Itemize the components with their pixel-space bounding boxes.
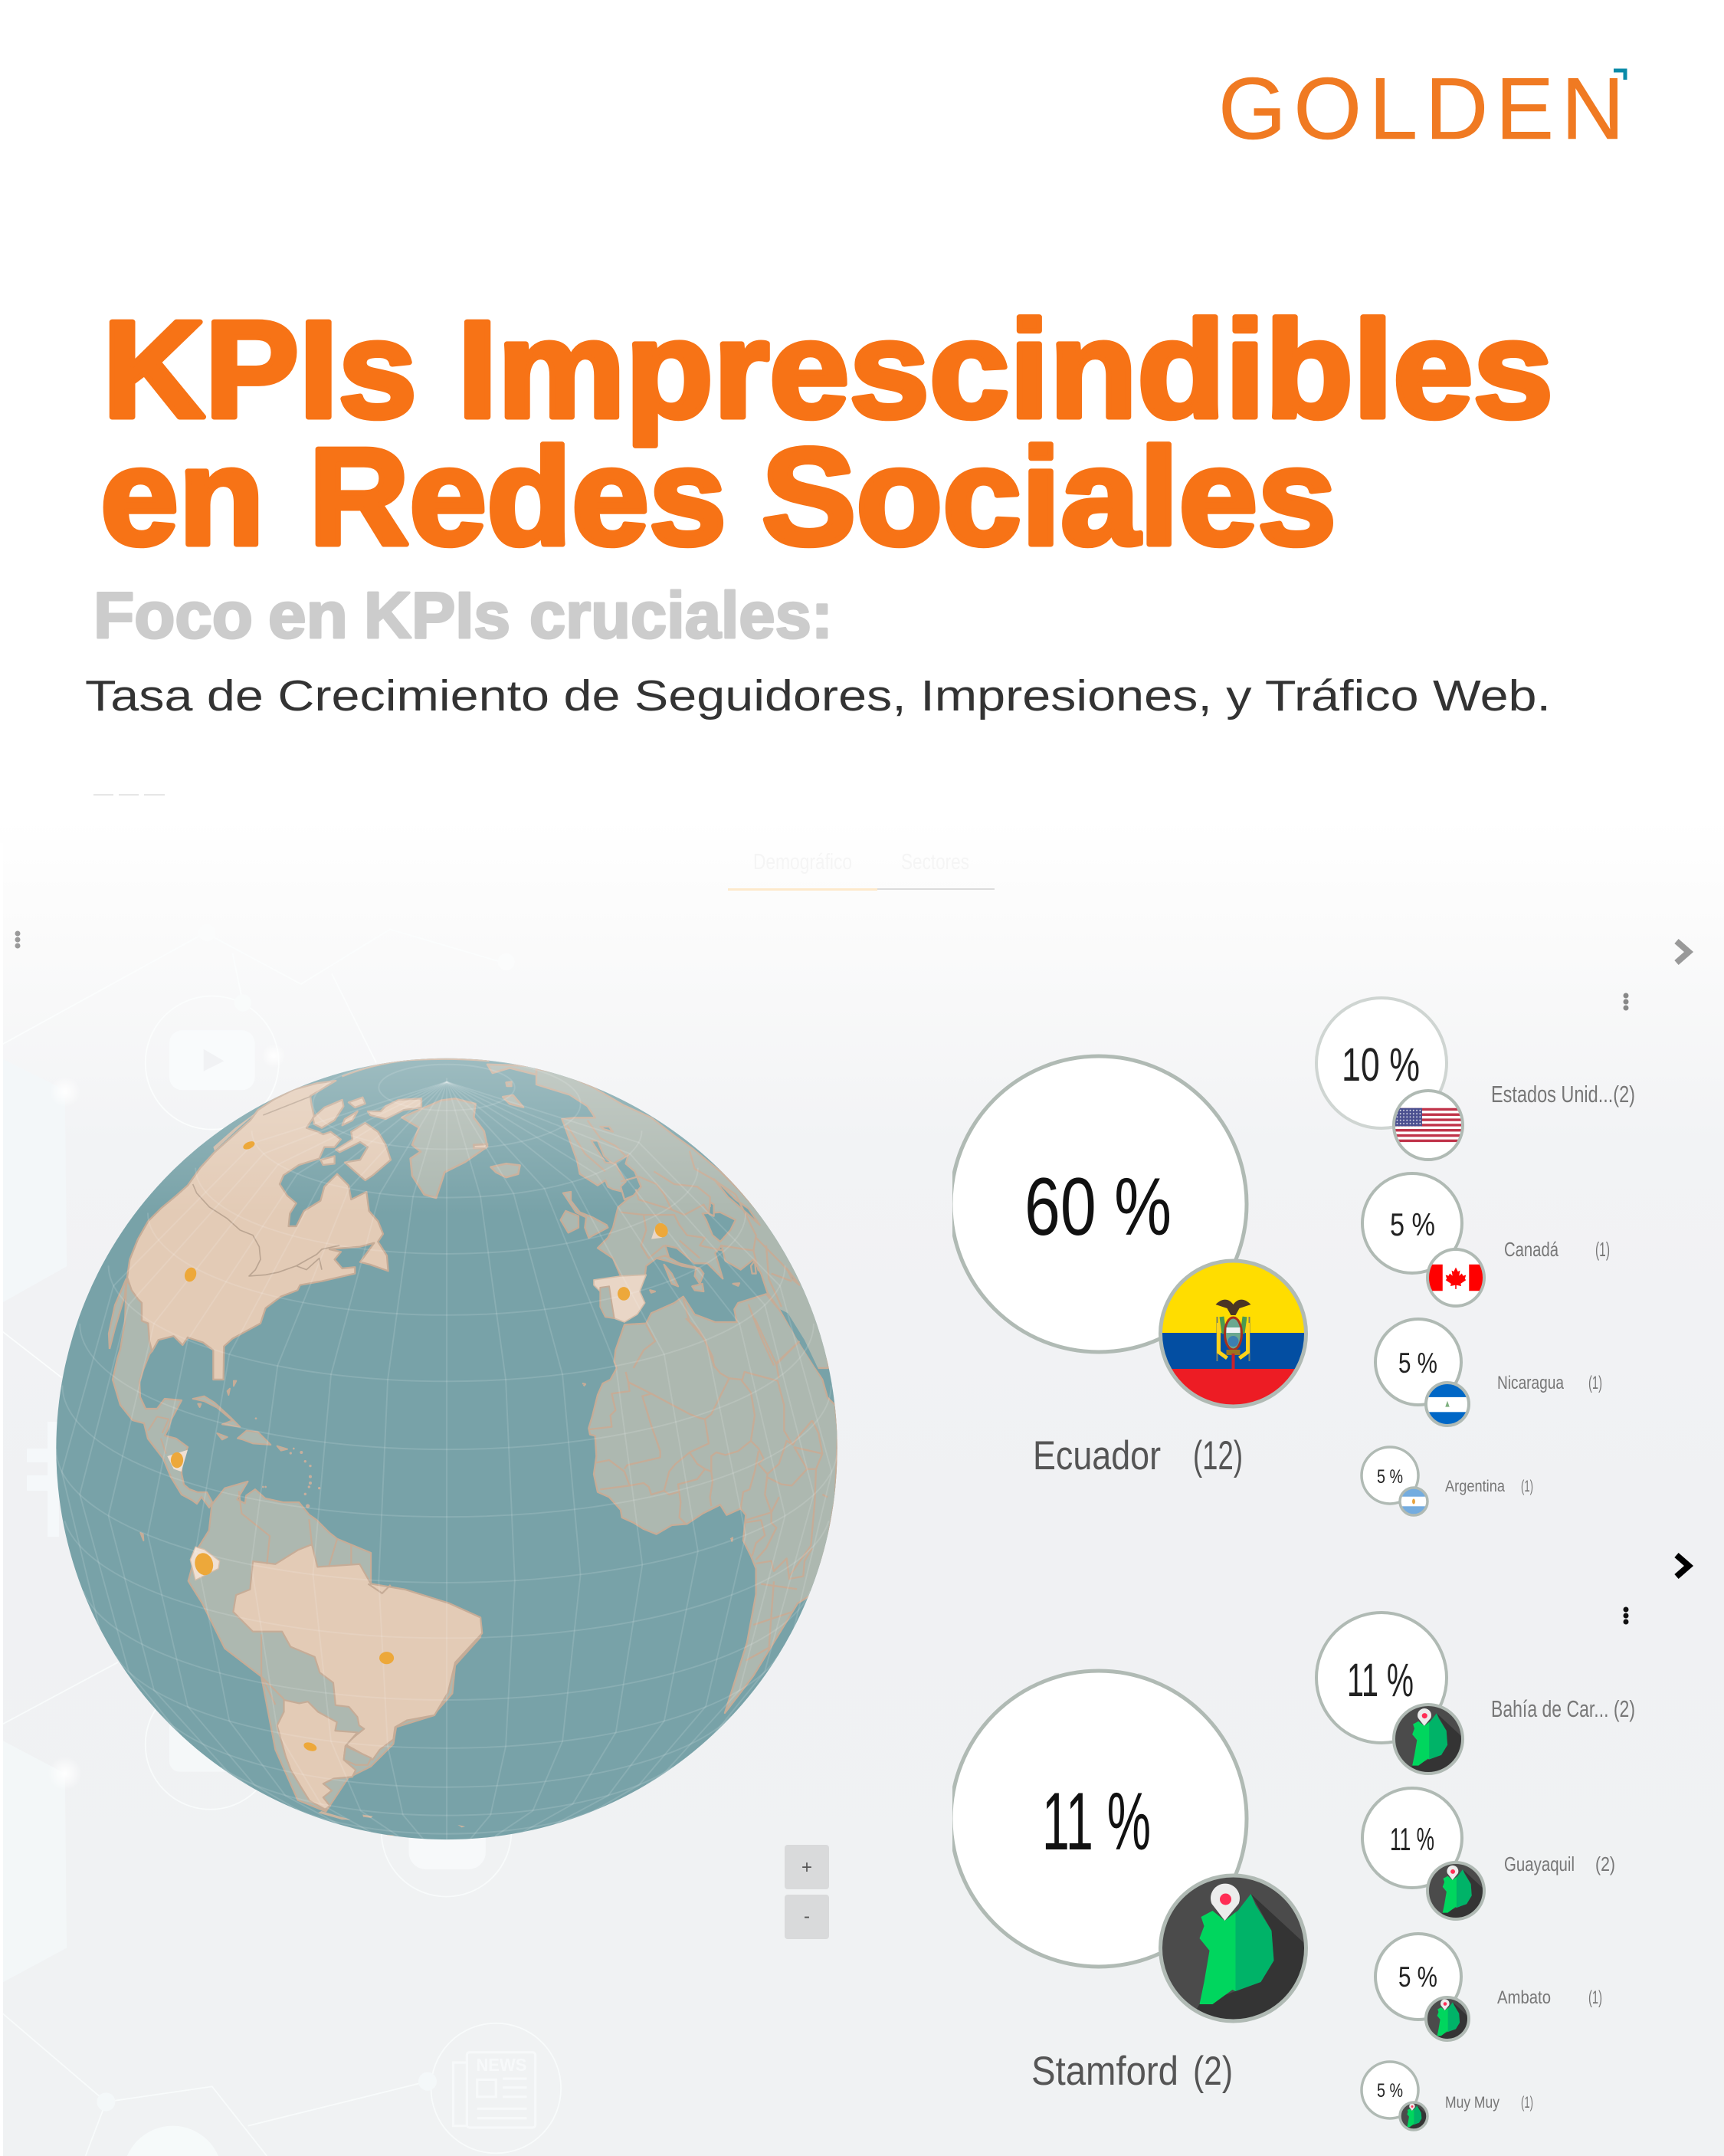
label: Stamford: Stamford <box>1031 2049 1178 2094</box>
title: Imprescindibles <box>457 293 1553 447</box>
Europe, Asia and northern Africa <box>536 1069 829 1368</box>
label: Guayaquil: Guayaquil <box>1504 1852 1575 1875</box>
background decoration: faint network and social icons: NEWS <box>476 2055 526 2075</box>
label: Canadá: Canadá <box>1504 1238 1558 1261</box>
ocean <box>56 1058 837 1839</box>
flag: Canada <box>1427 1249 1485 1307</box>
Mexico and Central America <box>113 1280 212 1508</box>
bubble: Muy Muy 5% <box>1362 2062 1418 2118</box>
label: Argentina: Argentina <box>1445 1478 1505 1495</box>
subtitle: Foco en KPIs cruciales <box>93 579 833 652</box>
subtitle: Foco en KPIs cruciales: KPIs <box>364 579 510 652</box>
flag: Nicaragua <box>1425 1382 1470 1426</box>
title: en <box>100 420 264 574</box>
title: Redes <box>309 420 726 574</box>
icon: Ambato map pin <box>1425 1997 1470 2042</box>
bubble: Guayaquil 11%: 11 % <box>1390 1821 1434 1857</box>
main bubble: Ecuador 60%: 60 % <box>1024 1160 1172 1252</box>
icon: Guayaquil map pin <box>1427 1862 1486 1921</box>
label: Ecuador: Ecuador <box>1033 1433 1161 1478</box>
label: Muy Muy: (1) <box>1521 2094 1533 2112</box>
icon: Stamford map pin <box>1159 1874 1310 2025</box>
subtitle: Foco en KPIs cruciales: cruciales: <box>529 579 833 652</box>
bubble: Estados Unidos 10% <box>1316 998 1447 1128</box>
bubble: Estados Unidos 10%: 10 % <box>1342 1039 1420 1091</box>
title <box>100 293 1553 574</box>
Ecuador <box>190 1547 220 1580</box>
description line: Tasa de Crecimiento de Seguidores, Impresiones, y Tráfico Web. <box>85 671 1551 720</box>
bubble: Canadá 5%: 5 % <box>1390 1206 1435 1242</box>
label: Muy Muy: Muy Muy <box>1445 2094 1499 2112</box>
title: Sociales <box>762 420 1336 574</box>
bubble: Nicaragua 5%: 5 % <box>1398 1347 1437 1379</box>
background decoration: faint network and social icons <box>0 843 561 2156</box>
bubble: Muy Muy 5%: 5 % <box>1377 2080 1403 2102</box>
zoom buttons <box>785 1845 829 1939</box>
panel: cities ranking <box>951 1613 1635 2131</box>
icon: Bahía map pin <box>1393 1704 1464 1775</box>
faint dashes <box>93 794 165 796</box>
label: Canadá <box>1504 1238 1610 1261</box>
menu dots: countries <box>1623 993 1629 1010</box>
Africa <box>582 1294 837 1713</box>
title: KPIs <box>103 293 417 447</box>
label: Guayaquil: (2) <box>1595 1852 1615 1875</box>
bubble: Argentina 5%: 5 % <box>1377 1466 1403 1488</box>
flag: Ecuador <box>1159 1259 1307 1408</box>
Baja California <box>109 1278 126 1349</box>
subtitle: Foco en KPIs cruciales: en <box>268 579 348 652</box>
tabs: Demográfico / Sectores <box>728 850 995 891</box>
Greenland, Iceland and Arctic <box>342 1059 536 1198</box>
panel: countries ranking <box>951 998 1635 1516</box>
atmosphere haze <box>166 1058 719 1179</box>
North America <box>127 1081 421 1380</box>
flag: Argentina <box>1399 1487 1428 1516</box>
bubble: Argentina 5% <box>1362 1447 1418 1504</box>
label: Nicaragua: (1) <box>1588 1373 1602 1393</box>
flag: USA <box>1393 1090 1463 1160</box>
tabs: Demográfico / Sectores: Sectores <box>901 850 969 875</box>
Spain <box>594 1224 668 1322</box>
main bubble: Stamford 11%: 11 % <box>1042 1775 1151 1867</box>
label: Ecuador: (12) <box>1193 1433 1243 1478</box>
main bubble: Ecuador 60% <box>951 1056 1247 1352</box>
label: Ambato: (1) <box>1588 1987 1602 2008</box>
label: Bahía de Caráquez: Bahía de Car... (2) <box>1491 1695 1635 1722</box>
bubble: Bahía de Caráquez 11% <box>1316 1613 1447 1743</box>
South America <box>188 1482 482 1811</box>
globe map <box>56 1058 837 1839</box>
chevron: countries <box>1676 941 1689 963</box>
icon: Muy Muy map pin <box>1399 2102 1429 2131</box>
main bubble: Stamford 11% <box>951 1671 1247 1967</box>
bubble: Ambato 5%: 5 % <box>1398 1961 1437 1993</box>
label: Stamford: (2) <box>1193 2049 1233 2094</box>
Argentina and Uruguay <box>277 1700 465 1837</box>
bubble: Canadá 5% <box>1362 1173 1462 1273</box>
label: Canadá: (1) <box>1595 1238 1610 1261</box>
subtitle: Foco en KPIs cruciales: Foco <box>93 579 253 652</box>
northern Africa borders <box>634 1299 799 1368</box>
data points <box>171 1140 670 1753</box>
label: Ambato <box>1497 1987 1602 2008</box>
label: Ambato: Ambato <box>1497 1987 1551 2008</box>
label: Nicaragua: Nicaragua <box>1497 1373 1565 1393</box>
label: Estados Unidos: Estados Unid...(2) <box>1491 1081 1635 1108</box>
bubble: Guayaquil 11% <box>1362 1788 1462 1888</box>
logo: GOLDEN: GOLDEN <box>1218 61 1624 158</box>
menu dots: cities <box>1623 1606 1629 1625</box>
zoom buttons: + <box>801 1857 812 1878</box>
graticule <box>56 1058 837 1839</box>
menu dots: globe <box>15 930 20 949</box>
tabs: Demográfico / Sectores: Demográfico <box>753 850 852 875</box>
bubble: Nicaragua 5% <box>1375 1319 1461 1405</box>
chevron: cities <box>1676 1555 1689 1577</box>
bubble: Ambato 5% <box>1375 1934 1461 2020</box>
label: Argentina: (1) <box>1521 1478 1533 1495</box>
Caribbean and Nicaragua <box>140 1381 320 1541</box>
zoom buttons: - <box>804 1906 810 1927</box>
bubble: Bahía de Caráquez 11%: 11 % <box>1347 1654 1414 1706</box>
